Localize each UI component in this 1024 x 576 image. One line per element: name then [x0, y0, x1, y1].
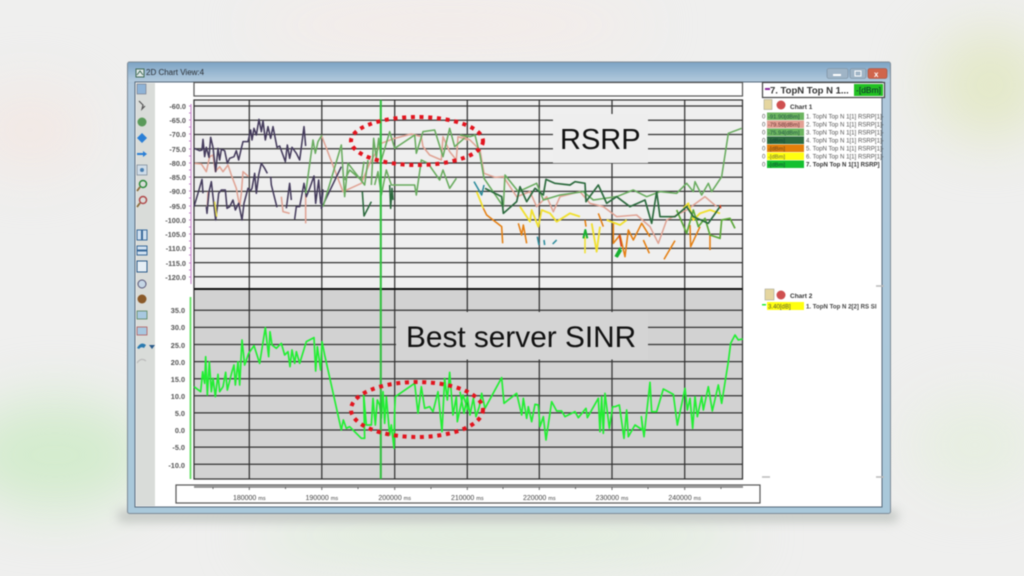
RSRP y axis labels: -85.0 [169, 173, 186, 182]
RSRP y axis labels: -90.0 [169, 187, 186, 196]
legend header [762, 82, 884, 98]
RSRP y axis labels: -115.0 [166, 259, 186, 268]
window controls [827, 68, 887, 79]
SINR y axis labels: 30.0 [171, 323, 185, 332]
legend: chart 1: -[dBm] [768, 138, 785, 144]
RSRP label [553, 114, 648, 163]
time axis: 240000 ms [668, 495, 701, 502]
legend: chart 1: 0 [762, 154, 766, 160]
time axis: 190000 ms [305, 495, 338, 502]
SINR y axis labels: 25.0 [171, 341, 185, 350]
RSRP y axis labels: -95.0 [169, 202, 186, 211]
legend: chart 1: 1. TopN Top N 1[1] RSRP[1]- [806, 114, 884, 120]
RSRP highlight ellipse [351, 117, 483, 165]
SINR y axis labels: 0.0 [175, 426, 185, 435]
time axis: 180000 ms [233, 495, 266, 502]
legend: chart 1: 0 [762, 146, 766, 152]
legend: chart 1: -[dBm] [768, 162, 785, 168]
chart divider [194, 288, 742, 290]
SINR y axis labels: 15.0 [171, 375, 185, 384]
legend: chart 1: 0 [762, 138, 766, 144]
SINR y axis ruler [190, 297, 192, 479]
legend: chart 1 [762, 100, 884, 168]
RSRP y axis labels: -80.0 [169, 159, 186, 168]
time axis: 210000 ms [451, 495, 484, 502]
RSRP y axis labels: -75.0 [169, 145, 186, 154]
RSRP y axis labels: -60.0 [169, 102, 186, 111]
legend: chart 1: 3. TopN Top N 1[1] RSRP[1]- [806, 130, 884, 136]
RSRP y axis labels [165, 102, 186, 282]
legend: chart 1: 5. TopN Top N 1[1] RSRP[1]- [806, 146, 884, 152]
RSRP traces, right part [460, 128, 742, 259]
RSRP y axis ruler [189, 104, 191, 284]
panel: RSRP chart background [194, 100, 742, 289]
SINR y axis labels [168, 306, 185, 470]
right pane scrollbar marks [762, 286, 884, 477]
legend: chart 1: -75.94[dBm] [768, 130, 800, 136]
legend: chart 1: 4. TopN Top N 1[1] RSRP[1]- [806, 138, 884, 144]
SINR y axis labels: 20.0 [171, 358, 185, 367]
legend: chart 1: 7. TopN Top N 1[1] RSRP] [806, 162, 880, 168]
legend: chart 1: Chart 1 [790, 104, 813, 111]
legend: chart 1: 6. TopN Top N 1[1] RSRP[1]- [806, 154, 884, 160]
RSRP traces, left part [194, 119, 468, 223]
cursor line [380, 100, 382, 479]
RSRP y axis labels: -100.0 [165, 216, 186, 225]
panel: SINR chart background [194, 289, 742, 479]
legend: chart 1: -[dBm] [768, 146, 785, 152]
SINR y axis labels: -10.0 [168, 461, 185, 470]
RSRP y axis labels: -105.0 [165, 230, 186, 239]
time axis: 200000 ms [378, 495, 411, 502]
RSRP y axis labels: -110.0 [166, 244, 186, 253]
legend: chart 1: -79.58[dBm] [768, 122, 800, 128]
legend: chart 2: 3.40[dB] [768, 304, 791, 310]
Best server SINR label: Best server SINR [406, 321, 636, 354]
legend: chart 1: -91.90[dBm] [768, 114, 800, 120]
RSRP y axis labels: -65.0 [169, 116, 186, 125]
SINR y axis labels: 5.0 [175, 409, 185, 418]
RSRP y axis labels: -70.0 [169, 130, 186, 139]
SINR y axis labels: 35.0 [171, 306, 185, 315]
SINR y axis labels: -5.0 [172, 443, 185, 452]
window title icon [136, 69, 144, 77]
time axis: 220000 ms [523, 495, 556, 502]
SINR trace, left part [194, 328, 468, 448]
SINR highlight ellipse [351, 382, 483, 437]
legend: chart 1: 0 [762, 122, 766, 128]
legend: chart 1: 0 [762, 130, 766, 136]
time axis [176, 485, 760, 503]
legend header: 7. TopN Top N 1... [770, 86, 849, 96]
time axis: 230000 ms [596, 495, 629, 502]
SINR y axis labels: 10.0 [171, 392, 185, 401]
legend: chart 1: 0 [762, 114, 766, 120]
RSRP y axis labels: -120.0 [165, 273, 186, 282]
top label bar [194, 82, 742, 96]
legend: chart 1: 2. TopN Top N 1[1] RSRP[1]- [806, 122, 884, 128]
toolbar icons [137, 84, 155, 363]
legend: chart 2: Chart 2 [790, 293, 813, 300]
Best server SINR label [396, 312, 648, 360]
chart grid [194, 100, 742, 479]
legend: chart 2: 1. TopN Top N 2[2] RS SI [806, 304, 877, 310]
window frame [128, 62, 890, 514]
SINR trace, right part [460, 335, 743, 440]
legend: chart 1: -[dBm] [768, 154, 785, 160]
legend: chart 1: 0 [762, 162, 766, 168]
RSRP label: RSRP [560, 124, 641, 156]
legend: chart 2 [762, 289, 877, 310]
window title: 2D Chart View:4 [146, 68, 205, 77]
window controls: x [874, 70, 879, 79]
legend header: -[dBm] [856, 85, 881, 95]
